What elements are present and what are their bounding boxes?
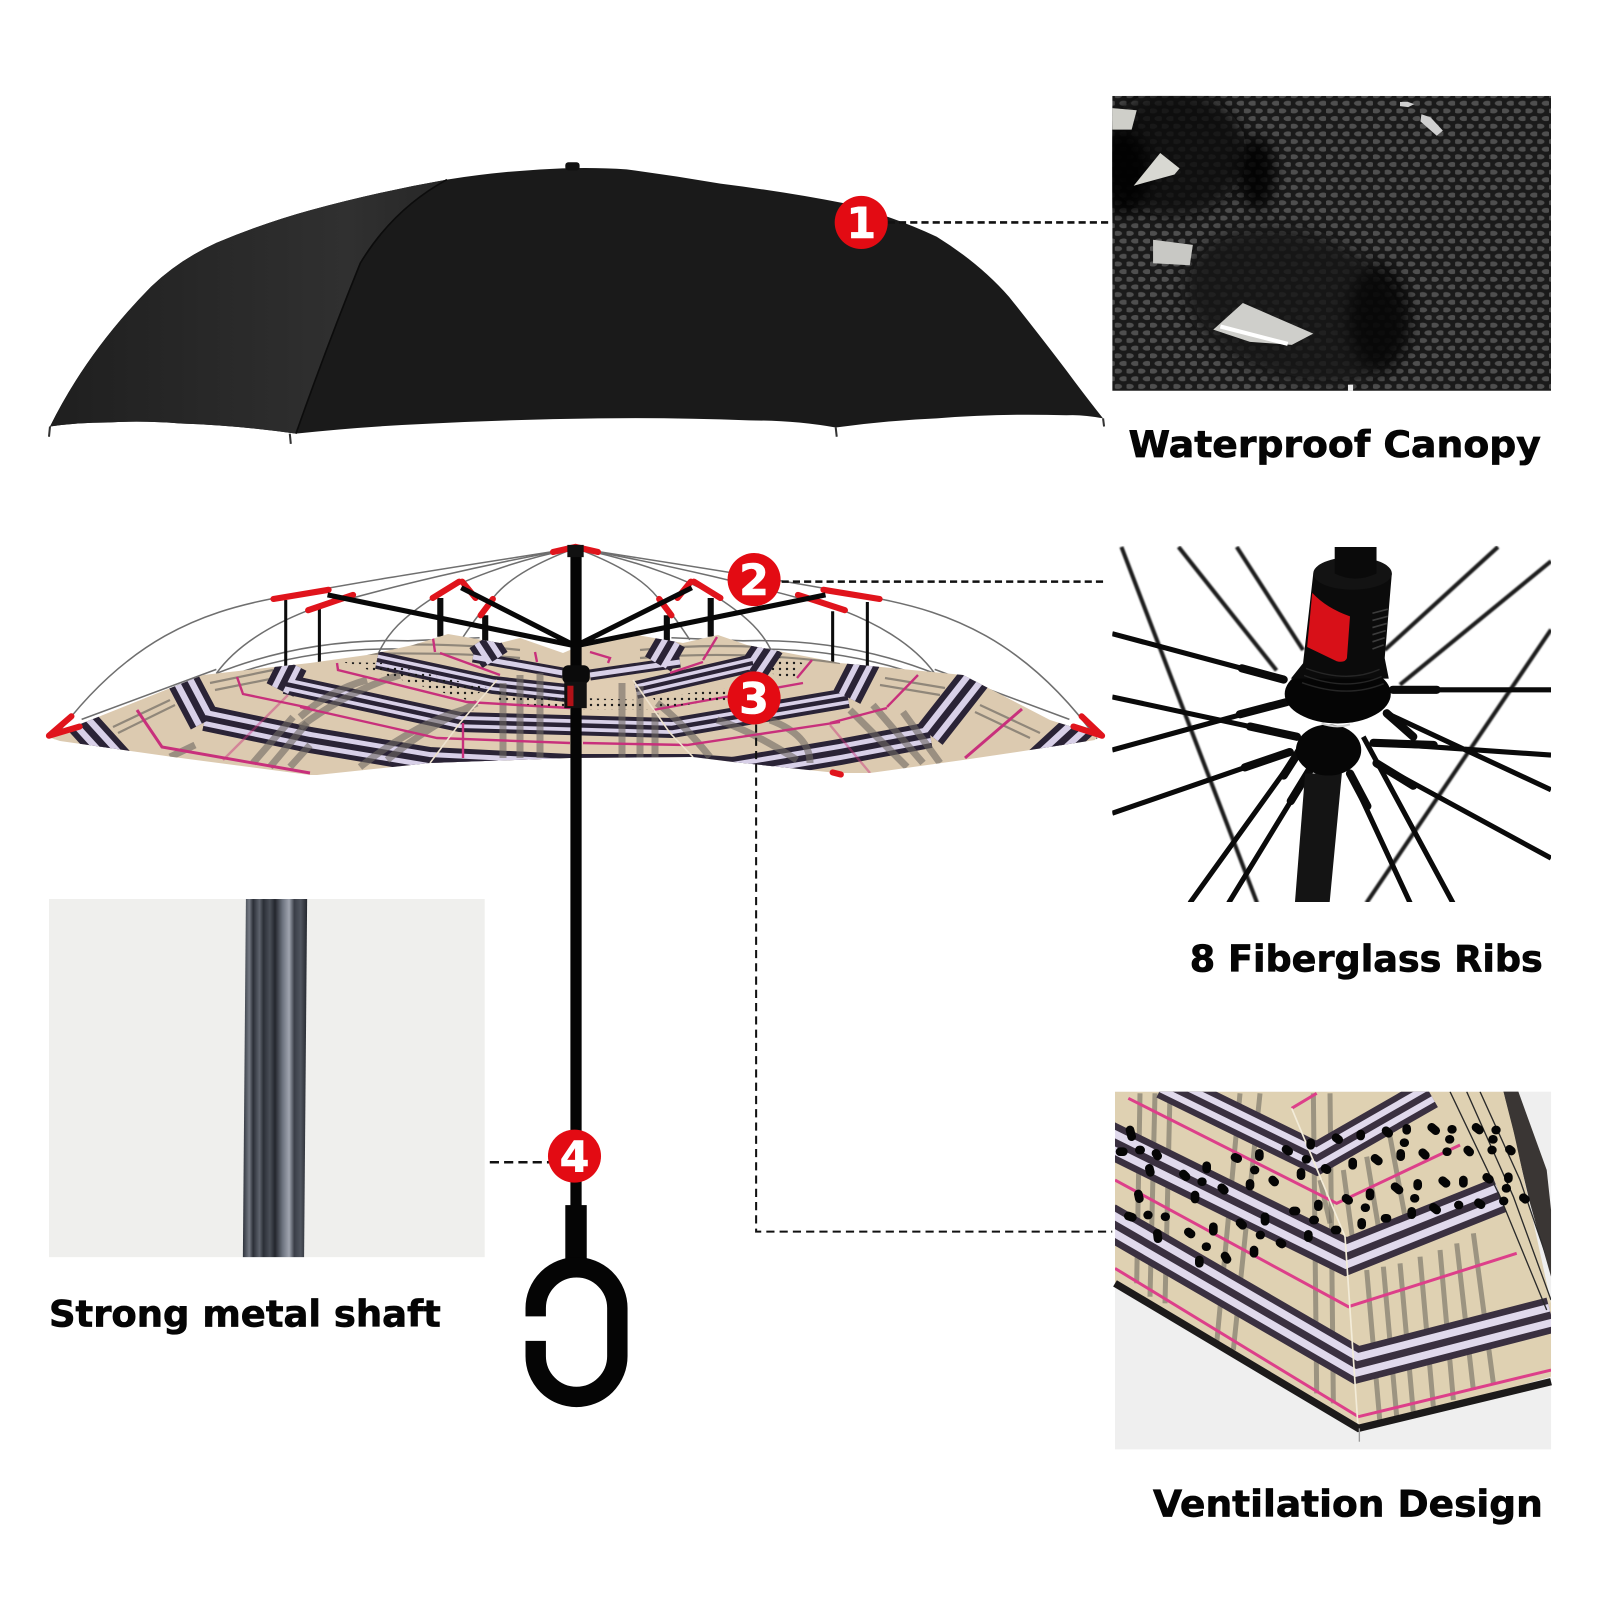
wide gray check stripes <box>170 673 940 767</box>
marker 3: 3 <box>739 674 769 724</box>
heading: Waterproof Canopy: Waterproof Canopy <box>1129 423 1541 466</box>
central shaft <box>570 556 582 1209</box>
canopy edge <box>1115 1283 1551 1428</box>
centre panel <box>512 757 677 760</box>
photo: ventilation design close-up <box>1107 1083 1551 1449</box>
bands dark <box>1107 1083 1551 1365</box>
runner <box>562 665 590 684</box>
plaid canopy <box>52 634 1096 775</box>
thin ring lines <box>113 644 1040 738</box>
marker 2: 2 <box>739 556 769 606</box>
seams <box>1292 1108 1358 1432</box>
leader line: ventilation <box>756 724 1112 1232</box>
marker 3 <box>728 671 781 724</box>
illustration: closed black umbrella canopy <box>49 162 1104 444</box>
red rib tips <box>49 547 1102 774</box>
ventilation holes <box>1120 1127 1525 1263</box>
photo: waterproof fabric with water drops <box>1112 96 1551 391</box>
leader line: ribs <box>782 580 1107 583</box>
lavender band layer <box>70 640 1090 770</box>
posts <box>286 598 867 670</box>
photo: fiberglass ribs hub <box>1112 547 1551 903</box>
marker 1 <box>835 196 888 249</box>
leader line: shaft <box>490 1161 549 1163</box>
gray stripes <box>1137 1093 1493 1423</box>
marker 2 <box>728 553 781 606</box>
icon: C-shaped handle <box>536 1205 617 1397</box>
dark band layer <box>70 640 1090 770</box>
marker 4 <box>548 1130 601 1183</box>
pink lines <box>137 637 1022 773</box>
frame arcs <box>54 548 1097 739</box>
panel seams <box>430 680 693 763</box>
ventilation dots <box>343 657 803 710</box>
illustration: open inverted umbrella <box>40 545 1110 1209</box>
heading: 8 Fiberglass Ribs: 8 Fiberglass Ribs <box>1190 937 1543 980</box>
centre dark stripe layer <box>70 640 1090 770</box>
heading: Ventilation Design: Ventilation Design <box>1153 1482 1543 1525</box>
leader line: canopy <box>888 221 1110 224</box>
marker 4: 4 <box>560 1132 589 1182</box>
heading: Strong metal shaft: Strong metal shaft <box>49 1293 441 1336</box>
marker 1: 1 <box>846 199 876 249</box>
thick ribs <box>328 588 826 646</box>
photo: metal shaft panel <box>49 899 485 1257</box>
pink lines <box>1115 1093 1551 1417</box>
